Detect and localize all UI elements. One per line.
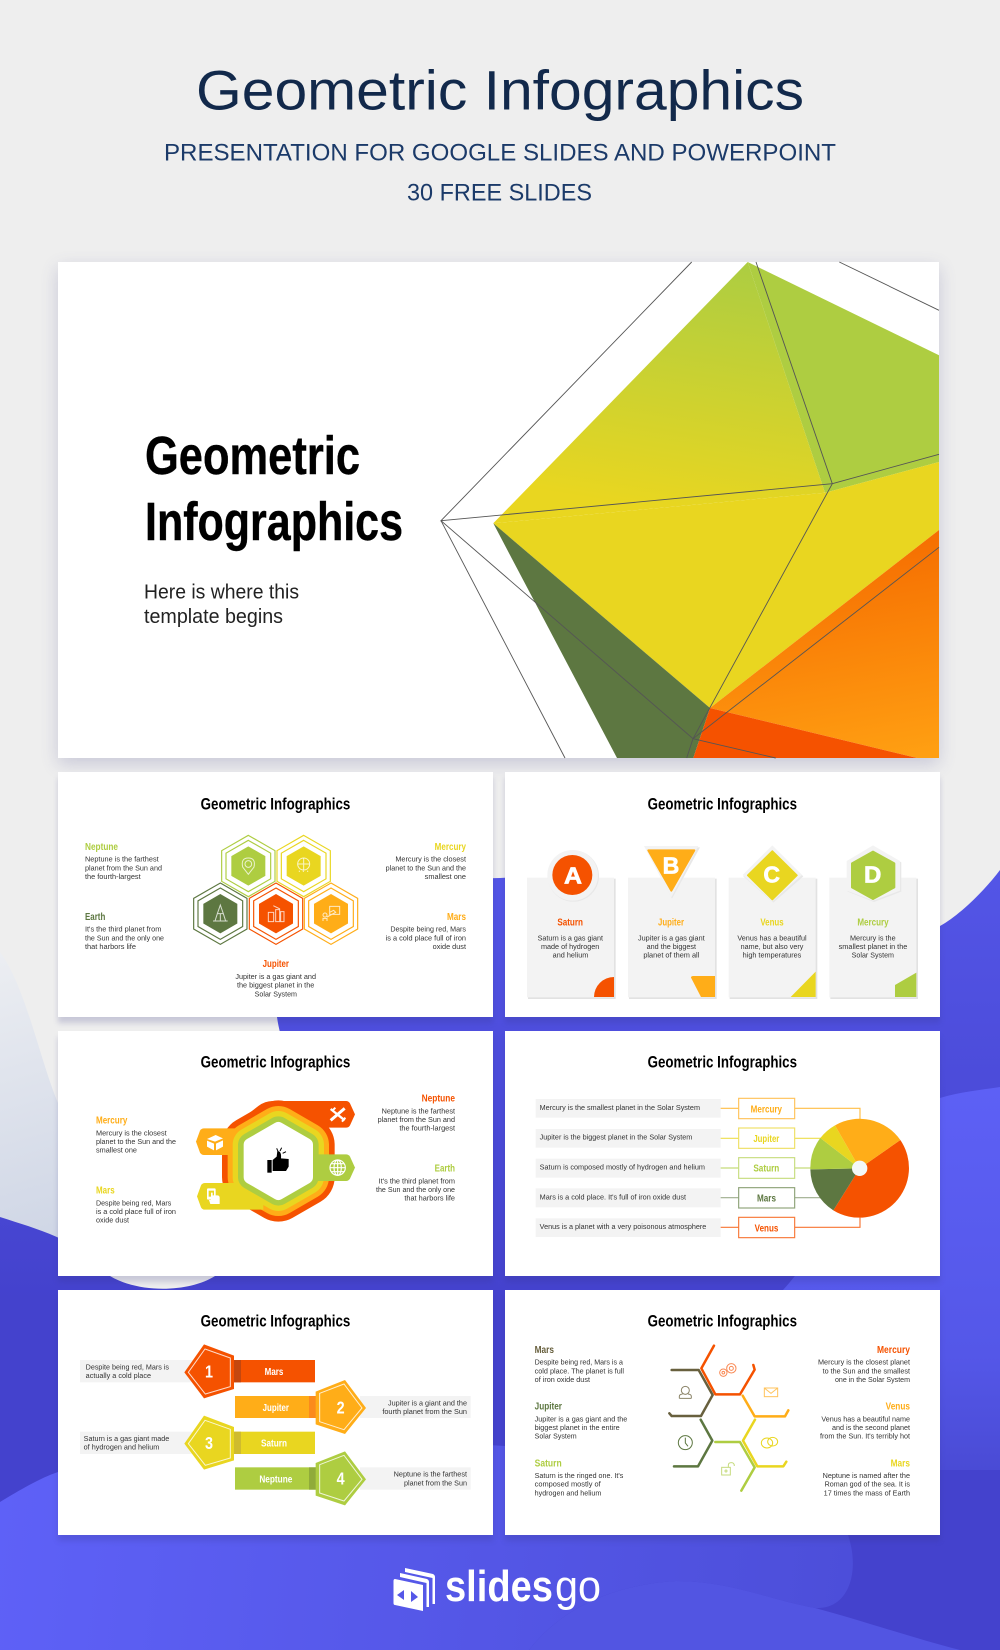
text: Earth [376, 1164, 455, 1203]
icon: airplane [331, 1108, 345, 1122]
center white hexagon [250, 1129, 306, 1193]
icon: open lock [722, 1463, 734, 1475]
text: Mercury: smallest one [425, 872, 466, 881]
text: Mars left: cold place. The planet is full [535, 1366, 624, 1375]
text: Saturn [535, 1459, 624, 1497]
text: Earth: the Sun and the only one [85, 933, 164, 942]
main title: Geometric Infographics [196, 58, 804, 122]
text: Mercury: one in the Solar System [835, 1375, 910, 1384]
text: Mercury: planet to the Sun and the [96, 1137, 176, 1146]
subtitle [164, 140, 836, 206]
icon: gears [720, 1364, 736, 1376]
label boxes [739, 1098, 795, 1238]
text: Jupiter: Jupiter [263, 959, 289, 970]
text: Earth: that harbors life [404, 1194, 455, 1203]
card B: Jupiter: B [663, 852, 679, 878]
pentagon 1 [184, 1344, 234, 1398]
description: Jupiter: fourth planet from the Sun [382, 1407, 467, 1416]
pentagon 1: 1 [205, 1362, 213, 1382]
text: Mercury [818, 1345, 911, 1384]
text: Mercury: Mercury is the closest [96, 1128, 167, 1137]
pentagon 2 [316, 1380, 366, 1434]
text: Earth: Earth [85, 912, 105, 923]
text: Saturn: hydrogen and helium [535, 1488, 601, 1497]
card D: Mercury: Mercury [857, 917, 889, 928]
ring: red orange with tag [229, 1101, 355, 1193]
text: Saturn: composed mostly of [535, 1480, 602, 1489]
bar: Saturn: Saturn [261, 1439, 287, 1450]
description: Saturn: of hydrogen and helium [84, 1443, 159, 1452]
text: Mars: oxide dust [96, 1216, 129, 1225]
panel: concentric hexagon slide [58, 1031, 493, 1282]
text: Mars: Mars [447, 912, 466, 923]
heading: Geometric Infographics [201, 794, 350, 813]
card D: Mercury [829, 845, 918, 999]
card B: Jupiter: Jupiter is a gas giant [638, 933, 705, 942]
rows: description bars: Jupiter is the biggest planet in the Solar System [540, 1133, 692, 1142]
description: Jupiter [360, 1396, 471, 1418]
text: Mars left: of iron oxide dust [535, 1375, 590, 1384]
text: Venus: Venus [886, 1402, 910, 1413]
pentagon 3 [184, 1416, 234, 1470]
description: Mars: actually a cold place [86, 1371, 151, 1380]
heading: Geometric Infographics [201, 1053, 350, 1072]
text: Mars left: Despite being red, Mars is a [535, 1358, 624, 1367]
label boxes: Venus [755, 1223, 778, 1234]
pentagon 2: 2 [337, 1397, 345, 1417]
bar: Saturn [234, 1432, 315, 1454]
cover title: Infographics [145, 492, 403, 552]
rows: description bars: Mercury is the smallest planet in the Solar System [540, 1103, 700, 1112]
text: Mars: Despite being red, Mars [390, 925, 466, 934]
text: Jupiter [535, 1402, 627, 1441]
text: Mars: is a cold place full of iron [386, 933, 466, 942]
icon: tablet and hand [207, 1188, 220, 1204]
bar: Mars: Mars [265, 1367, 283, 1378]
text: Mercury: Mercury [877, 1345, 911, 1356]
panel: hexagon slide [58, 772, 493, 1023]
subtitle: 30 FREE SLIDES [407, 180, 592, 206]
panel: honeycomb slide [505, 1290, 940, 1541]
description: Saturn: Saturn is a gas giant made [84, 1434, 169, 1443]
logo: slidesgo [394, 1562, 601, 1611]
hexagon: red orange [249, 883, 303, 944]
text: Neptune [85, 842, 162, 881]
text: Neptune: the fourth-largest [85, 872, 141, 881]
cover subtitle: template begins [144, 606, 283, 628]
heading: Geometric Infographics [648, 1312, 797, 1331]
description: Saturn [80, 1432, 193, 1454]
text: Mars: Mars [96, 1186, 115, 1197]
text: Earth [85, 912, 164, 951]
text: Earth: It's the third planet from [379, 1176, 455, 1185]
description: Neptune: planet from the Sun [404, 1478, 467, 1487]
icon: person [679, 1386, 691, 1398]
pentagon 4 [316, 1451, 366, 1505]
cover title [145, 426, 403, 552]
text: Jupiter: the biggest planet in the [237, 981, 314, 990]
text: Mars right: Neptune is named after the [823, 1471, 910, 1480]
text: Mars [386, 912, 466, 951]
text: Jupiter: Jupiter is a gas giant and the [535, 1414, 627, 1423]
card D: Mercury: Mercury is the [850, 933, 896, 942]
text: Mars right: 17 times the mass of Earth [824, 1488, 910, 1497]
text: Jupiter: Jupiter is a gas giant and [235, 972, 316, 981]
text: Mars left: Mars [535, 1345, 554, 1356]
text: Neptune: Neptune [85, 842, 119, 853]
polyhedron graphic [441, 262, 939, 758]
text: Jupiter: Jupiter [535, 1402, 562, 1413]
bar: Neptune: Neptune [259, 1474, 293, 1485]
card D: Mercury: smallest planet in the [839, 942, 907, 951]
panel: cover slide [58, 262, 939, 764]
pie chart [810, 1119, 909, 1218]
icon: thumbs up [267, 1148, 289, 1173]
panel: pentagon list slide [58, 1290, 493, 1541]
card B: Jupiter: and the biggest [647, 942, 696, 951]
heading: Geometric Infographics [201, 1312, 350, 1331]
text: Neptune: planet from the Sun and [85, 863, 162, 872]
text: Venus: and is the second planet [832, 1423, 910, 1432]
text: Mercury: Mercury [435, 842, 467, 853]
logo wordmark: go [555, 1562, 601, 1611]
card B: Jupiter: planet of them all [643, 951, 700, 960]
card A: Saturn: Saturn is a gas giant [538, 933, 603, 942]
subtitle: PRESENTATION FOR GOOGLE SLIDES AND POWERPOINT [164, 140, 836, 166]
text: Mars right: Roman god of the sea. It is [825, 1480, 910, 1489]
text: Venus: from the Sun. It's terribly hot [820, 1432, 910, 1441]
heading: Geometric Infographics [648, 1053, 797, 1072]
text: Mercury: to the Sun and the smallest [823, 1366, 910, 1375]
text: Saturn: Saturn is the ringed one. It's [535, 1471, 624, 1480]
text: Earth: that harbors life [85, 942, 136, 951]
text: Earth: It's the third planet from [85, 925, 161, 934]
card D: Mercury: D [864, 861, 881, 887]
logo icon [394, 1568, 435, 1611]
card A: Saturn: and helium [553, 951, 588, 960]
card C: Venus: C [763, 861, 780, 887]
pentagon 3: 3 [205, 1433, 213, 1453]
bar: Jupiter: Jupiter [263, 1403, 289, 1414]
text: Jupiter: Solar System [255, 989, 297, 998]
bar: Mars [234, 1360, 315, 1382]
heading: Geometric Infographics [648, 794, 797, 813]
card C: Venus [729, 845, 817, 999]
card C: Venus: name, but also very [741, 942, 804, 951]
ring: green with tag [250, 1129, 355, 1193]
card B: Jupiter: Jupiter [658, 917, 684, 928]
card C: Venus: Venus has a beautiful [737, 933, 807, 942]
logo wordmark: slides [445, 1562, 553, 1611]
text: Saturn: Saturn [535, 1459, 562, 1470]
text: Mercury: planet to the Sun and the [386, 863, 466, 872]
text: Neptune: Neptune is the farthest [382, 1106, 455, 1115]
card B: Jupiter [628, 846, 717, 999]
text: Mars: oxide dust [433, 942, 466, 951]
text: Venus: Venus has a beautiful name [821, 1414, 910, 1423]
text: Mars right: Mars [891, 1459, 910, 1470]
label boxes: Mars [757, 1194, 776, 1205]
description: Mars: Despite being red, Mars is [86, 1362, 169, 1371]
label boxes: Jupiter [753, 1134, 780, 1145]
panel: pie chart slide [505, 1031, 940, 1282]
text: Jupiter [235, 959, 316, 998]
ring: yellow with tag [197, 1129, 306, 1210]
card A: Saturn: made of hydrogen [541, 942, 599, 951]
cover title: Geometric [145, 426, 360, 486]
cover subtitle: Here is where this [144, 582, 299, 604]
hexagon: yellow [277, 835, 330, 897]
text: Mars [96, 1186, 176, 1225]
panel: letter cards slide [505, 772, 940, 1023]
text: Mercury: smallest one [96, 1146, 137, 1155]
text: Mars: is a cold place full of iron [96, 1207, 176, 1216]
rows: description bars: Venus is a planet with a very poisonous atmosphere [540, 1222, 706, 1231]
card A: Saturn [527, 850, 616, 999]
icon: globe [330, 1160, 345, 1175]
hexagon: dark green [194, 883, 247, 944]
card D: Mercury: Solar System [852, 951, 894, 960]
text: Mars: Despite being red, Mars [96, 1198, 172, 1207]
text: Jupiter: biggest planet in the entire [535, 1423, 620, 1432]
pentagon 4: 4 [337, 1469, 345, 1489]
card C: Venus: high temperatures [743, 951, 802, 960]
card A: Saturn: Saturn [557, 917, 583, 928]
rows: description bars [536, 1099, 721, 1237]
card C: Venus: Venus [760, 917, 784, 928]
card A: Saturn: A [564, 862, 582, 888]
icon: chat bubbles [761, 1437, 778, 1448]
icon: clock [678, 1436, 692, 1450]
bar: Neptune [235, 1467, 316, 1490]
hexagon: green [222, 835, 275, 897]
icon: envelope [764, 1388, 778, 1397]
label boxes: Saturn [753, 1164, 779, 1175]
text: Mercury: Mercury is the closest planet [818, 1358, 910, 1367]
connector lines [721, 1108, 860, 1227]
rows: description bars: Saturn is composed mostly of hydrogen and helium [540, 1162, 705, 1171]
text: Mars right [823, 1459, 910, 1497]
description: Neptune [360, 1467, 471, 1490]
text: Jupiter: Solar System [535, 1432, 577, 1441]
hexagon: orange [304, 883, 358, 944]
cover subtitle [144, 582, 299, 628]
honeycomb line segments [669, 1346, 788, 1491]
text: Mercury: Mercury is the closest [395, 855, 466, 864]
label boxes: Mercury [751, 1104, 783, 1115]
text: Mars left [535, 1345, 624, 1384]
text: Venus [820, 1402, 910, 1441]
description: Neptune: Neptune is the farthest [394, 1470, 467, 1479]
text: Neptune: Neptune [422, 1094, 456, 1105]
text: Neptune: planet from the Sun and [378, 1115, 455, 1124]
description: Jupiter: Jupiter is a giant and the [388, 1398, 467, 1407]
text: Earth: the Sun and the only one [376, 1185, 455, 1194]
text: Earth: Earth [435, 1164, 455, 1175]
rows: description bars: Mars is a cold place. It's full of iron oxide dust [540, 1192, 686, 1201]
text: Neptune: the fourth-largest [399, 1124, 455, 1133]
ring: orange with tag [196, 1128, 306, 1193]
text: Mercury [386, 842, 467, 881]
text: Mercury: Mercury [96, 1115, 128, 1126]
text: Neptune: Neptune is the farthest [85, 855, 159, 864]
bar: Jupiter [235, 1396, 316, 1418]
description: Mars [80, 1360, 193, 1382]
icon: box [207, 1135, 223, 1150]
text: Mercury [96, 1115, 176, 1155]
text: Neptune [378, 1094, 456, 1133]
